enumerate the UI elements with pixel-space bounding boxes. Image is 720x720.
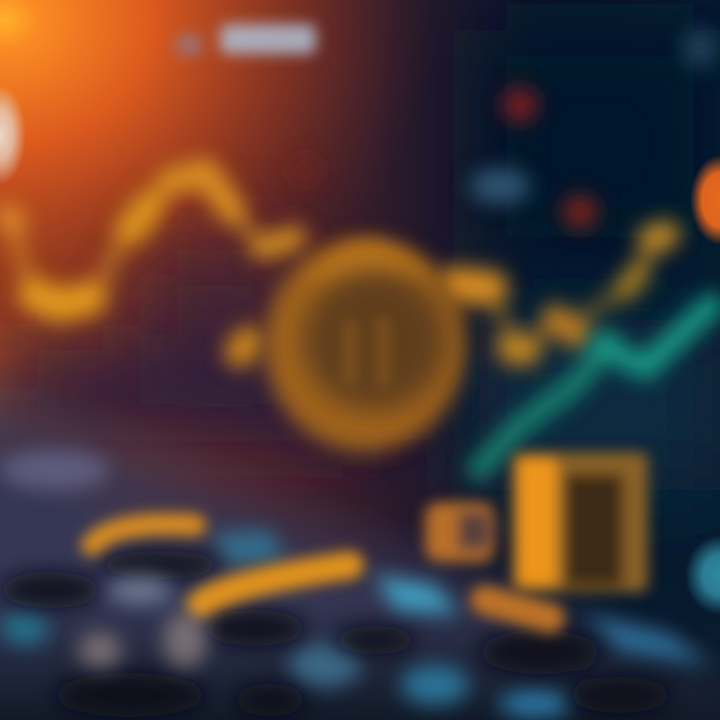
orange price line — [8, 172, 665, 352]
blurred header label — [176, 24, 316, 56]
ground plane — [0, 300, 720, 720]
left edge glow — [0, 85, 26, 185]
pale foreground flecks — [0, 450, 207, 668]
blue water patches — [1, 530, 710, 718]
blue patch at right edge — [685, 535, 720, 615]
dark foreground patches — [0, 551, 670, 717]
orange bar block — [425, 452, 648, 592]
teal price line — [478, 305, 712, 470]
red-orange peak marker — [690, 155, 720, 245]
gold coin — [265, 239, 465, 451]
dark chart field — [0, 30, 720, 490]
scattered market dots — [289, 28, 718, 229]
orange foreground ribbons — [92, 524, 550, 618]
